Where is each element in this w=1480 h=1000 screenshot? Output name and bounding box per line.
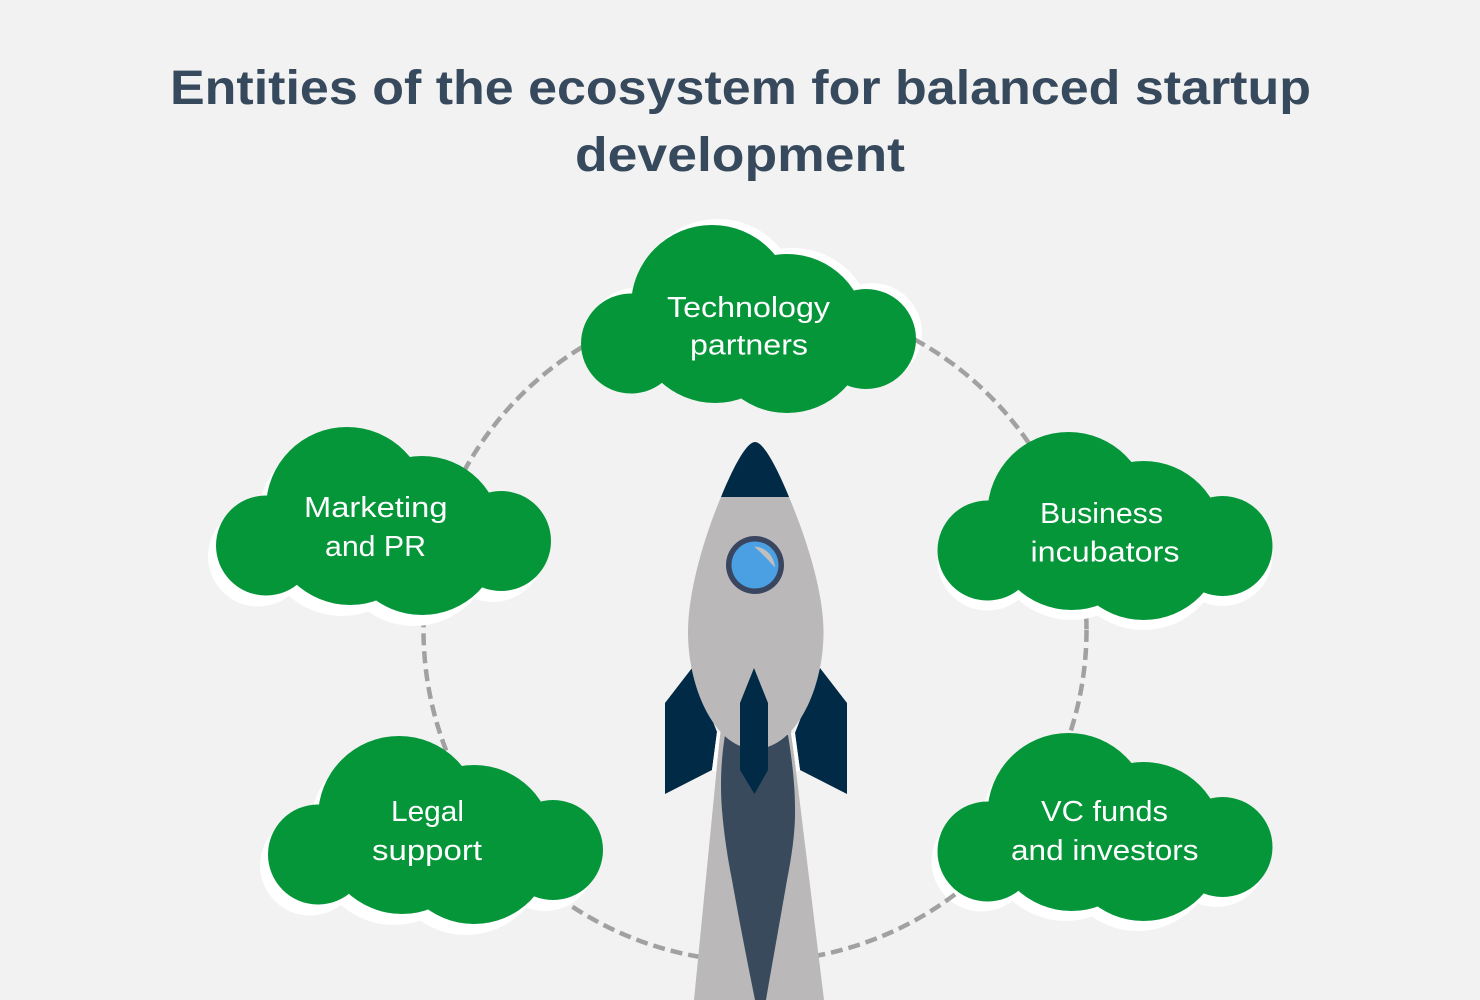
cloud: VC funds and investors: VC funds — [1041, 796, 1168, 828]
cloud: Legal support: support — [372, 835, 482, 867]
white cloud shadows beneath the ring — [587, 219, 1266, 931]
title: Entities of the ecosystem for balanced startup — [170, 62, 1311, 115]
cloud: Legal support: Legal — [391, 796, 464, 828]
cloud: Marketing and PR: Marketing — [304, 492, 448, 524]
rocket porthole — [726, 536, 784, 594]
cloud: Technology partners — [581, 225, 916, 413]
cloud: Technology partners: Technology — [667, 292, 831, 324]
rocket exhaust trail — [694, 730, 824, 1000]
rocket nose cone — [721, 442, 789, 497]
rocket body — [688, 497, 824, 749]
cloud: Marketing and PR: and PR — [325, 531, 426, 563]
white gaps between fins and exhaust — [712, 732, 800, 772]
dashed ring connecting the clouds — [424, 298, 1086, 962]
rocket illustration — [665, 442, 847, 1000]
cloud: Business incubators — [938, 432, 1272, 630]
cloud: Marketing and PR — [208, 427, 551, 626]
rocket centre fin — [740, 668, 768, 794]
cloud: Business incubators: incubators — [1030, 536, 1180, 568]
cloud: VC funds and investors: and investors — [1011, 835, 1198, 867]
cloud: Business incubators: Business — [1040, 498, 1163, 530]
title: development — [575, 129, 905, 182]
cloud: Legal support — [260, 736, 603, 935]
rocket left fin — [665, 668, 717, 794]
cloud: Technology partners: partners — [690, 330, 808, 362]
rocket inner flame — [721, 735, 795, 1000]
cloud: VC funds and investors — [938, 733, 1272, 921]
rocket right fin — [795, 668, 847, 794]
title — [170, 62, 1311, 182]
